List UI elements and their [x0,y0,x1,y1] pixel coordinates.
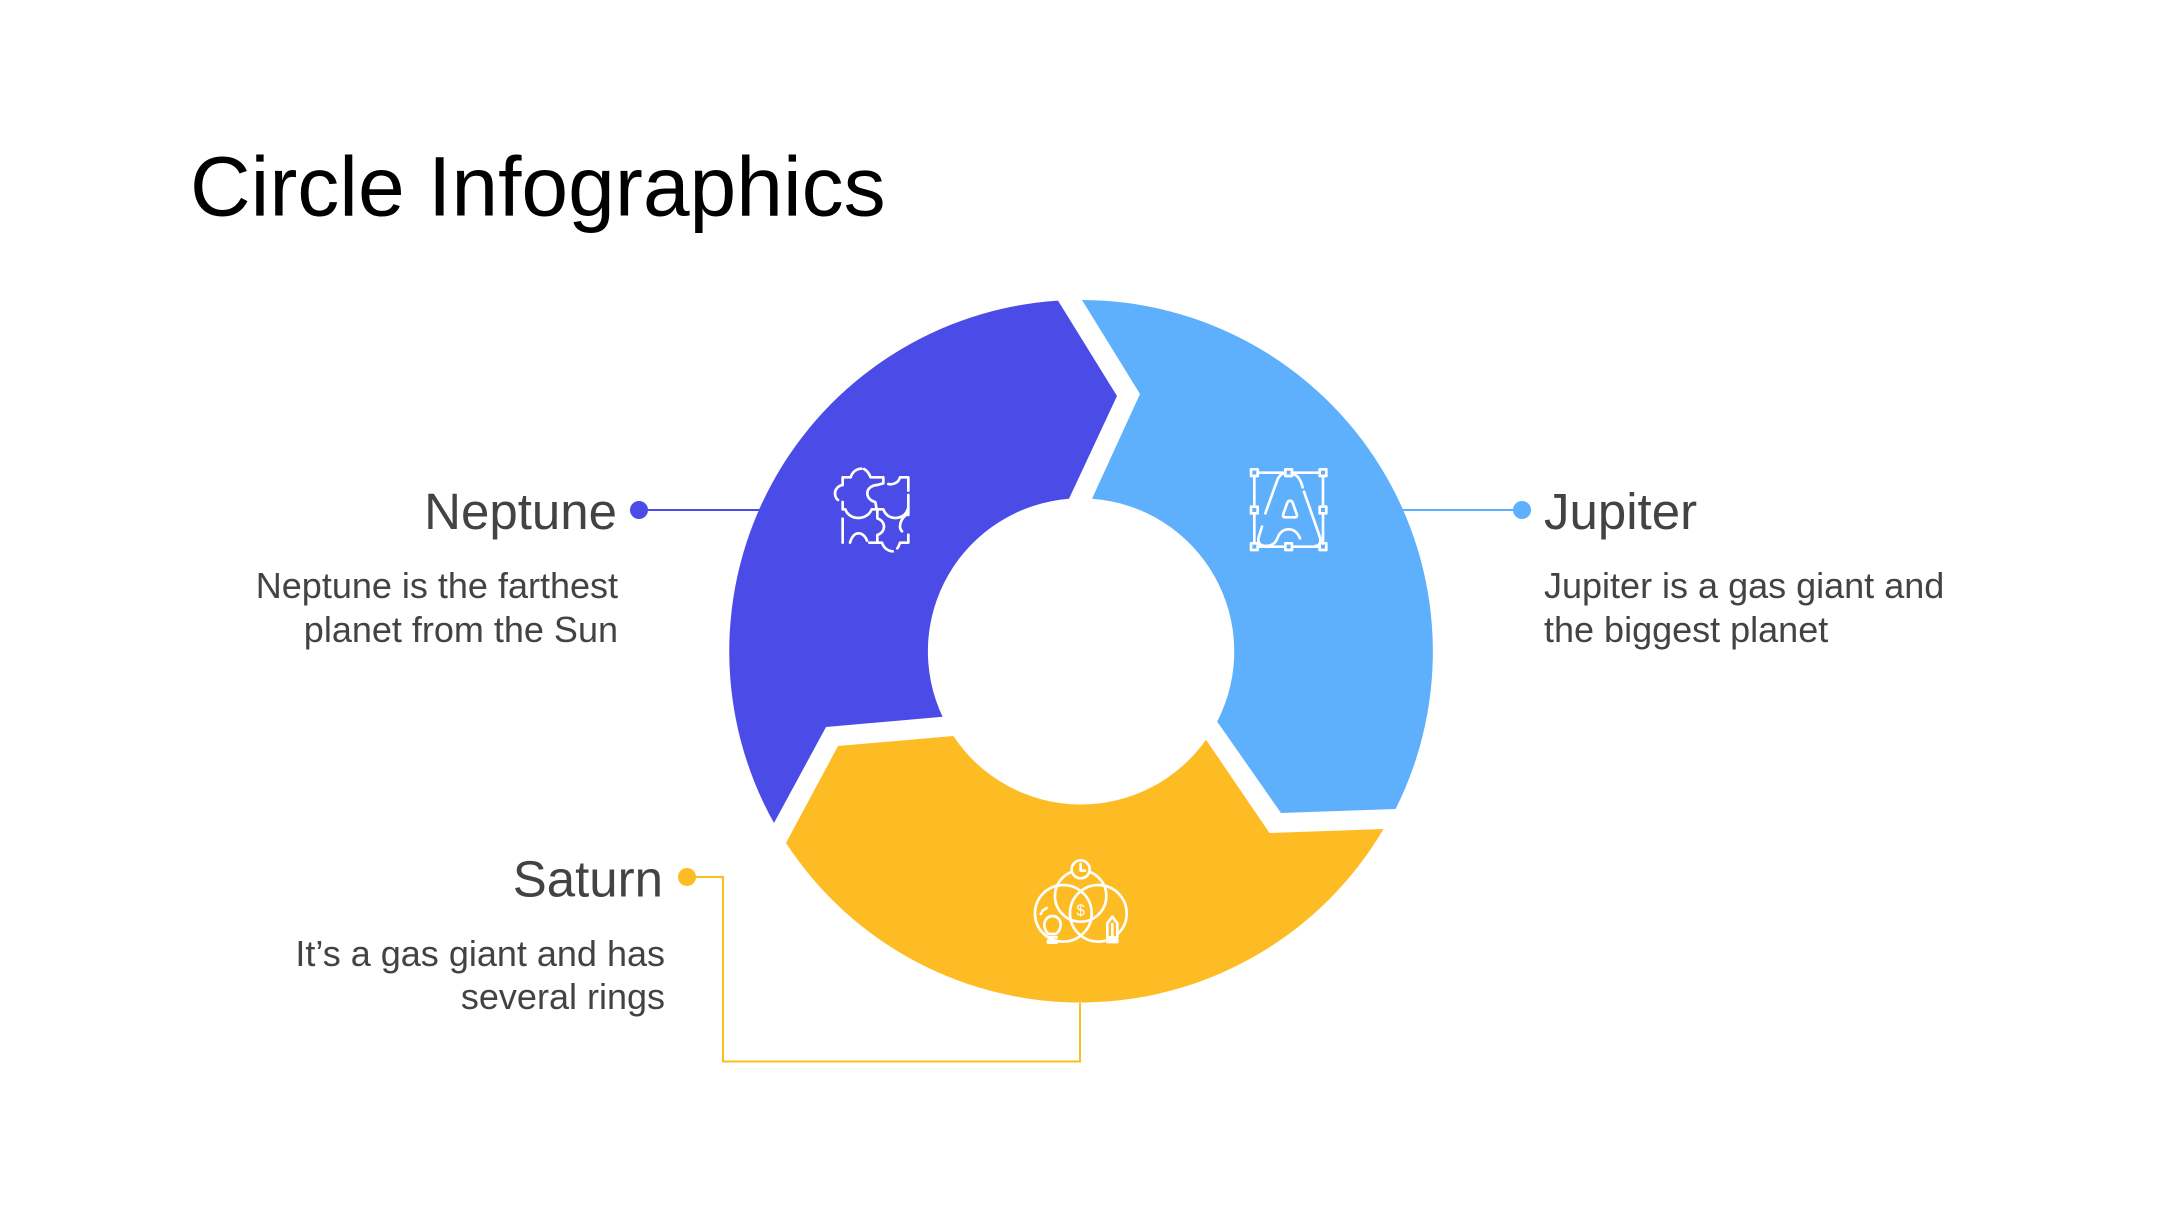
text block: Neptune: Neptune is the farthest [256,565,618,606]
text block: Saturn: It’s a gas giant and has [295,933,665,974]
segment: Saturn [786,736,1384,1002]
text block: Jupiter: Jupiter is a gas giant and [1544,565,1944,606]
connector: Jupiter [1402,501,1531,519]
icon: puzzle [835,469,908,551]
heading: Jupiter: Jupiter [1544,483,1697,540]
connector: Saturn [678,868,1080,1062]
text block: Jupiter: the biggest planet [1544,609,1828,650]
text block: Neptune: planet from the Sun [304,609,618,650]
text block: Saturn: several rings [461,976,665,1017]
icon: venn diagram with clock, money, bulb and pencil [1035,860,1127,943]
icon: vector letter A [1251,469,1326,550]
title: Circle Infographics [190,140,886,234]
segment: Neptune [729,301,1117,823]
icon glyph: dollar sign: $ [1076,903,1085,920]
segment: Jupiter [1082,300,1433,813]
heading: Neptune: Neptune [424,483,617,540]
donut chart [729,300,1433,1002]
heading: Saturn: Saturn [513,850,663,908]
connector: Neptune [630,501,765,519]
